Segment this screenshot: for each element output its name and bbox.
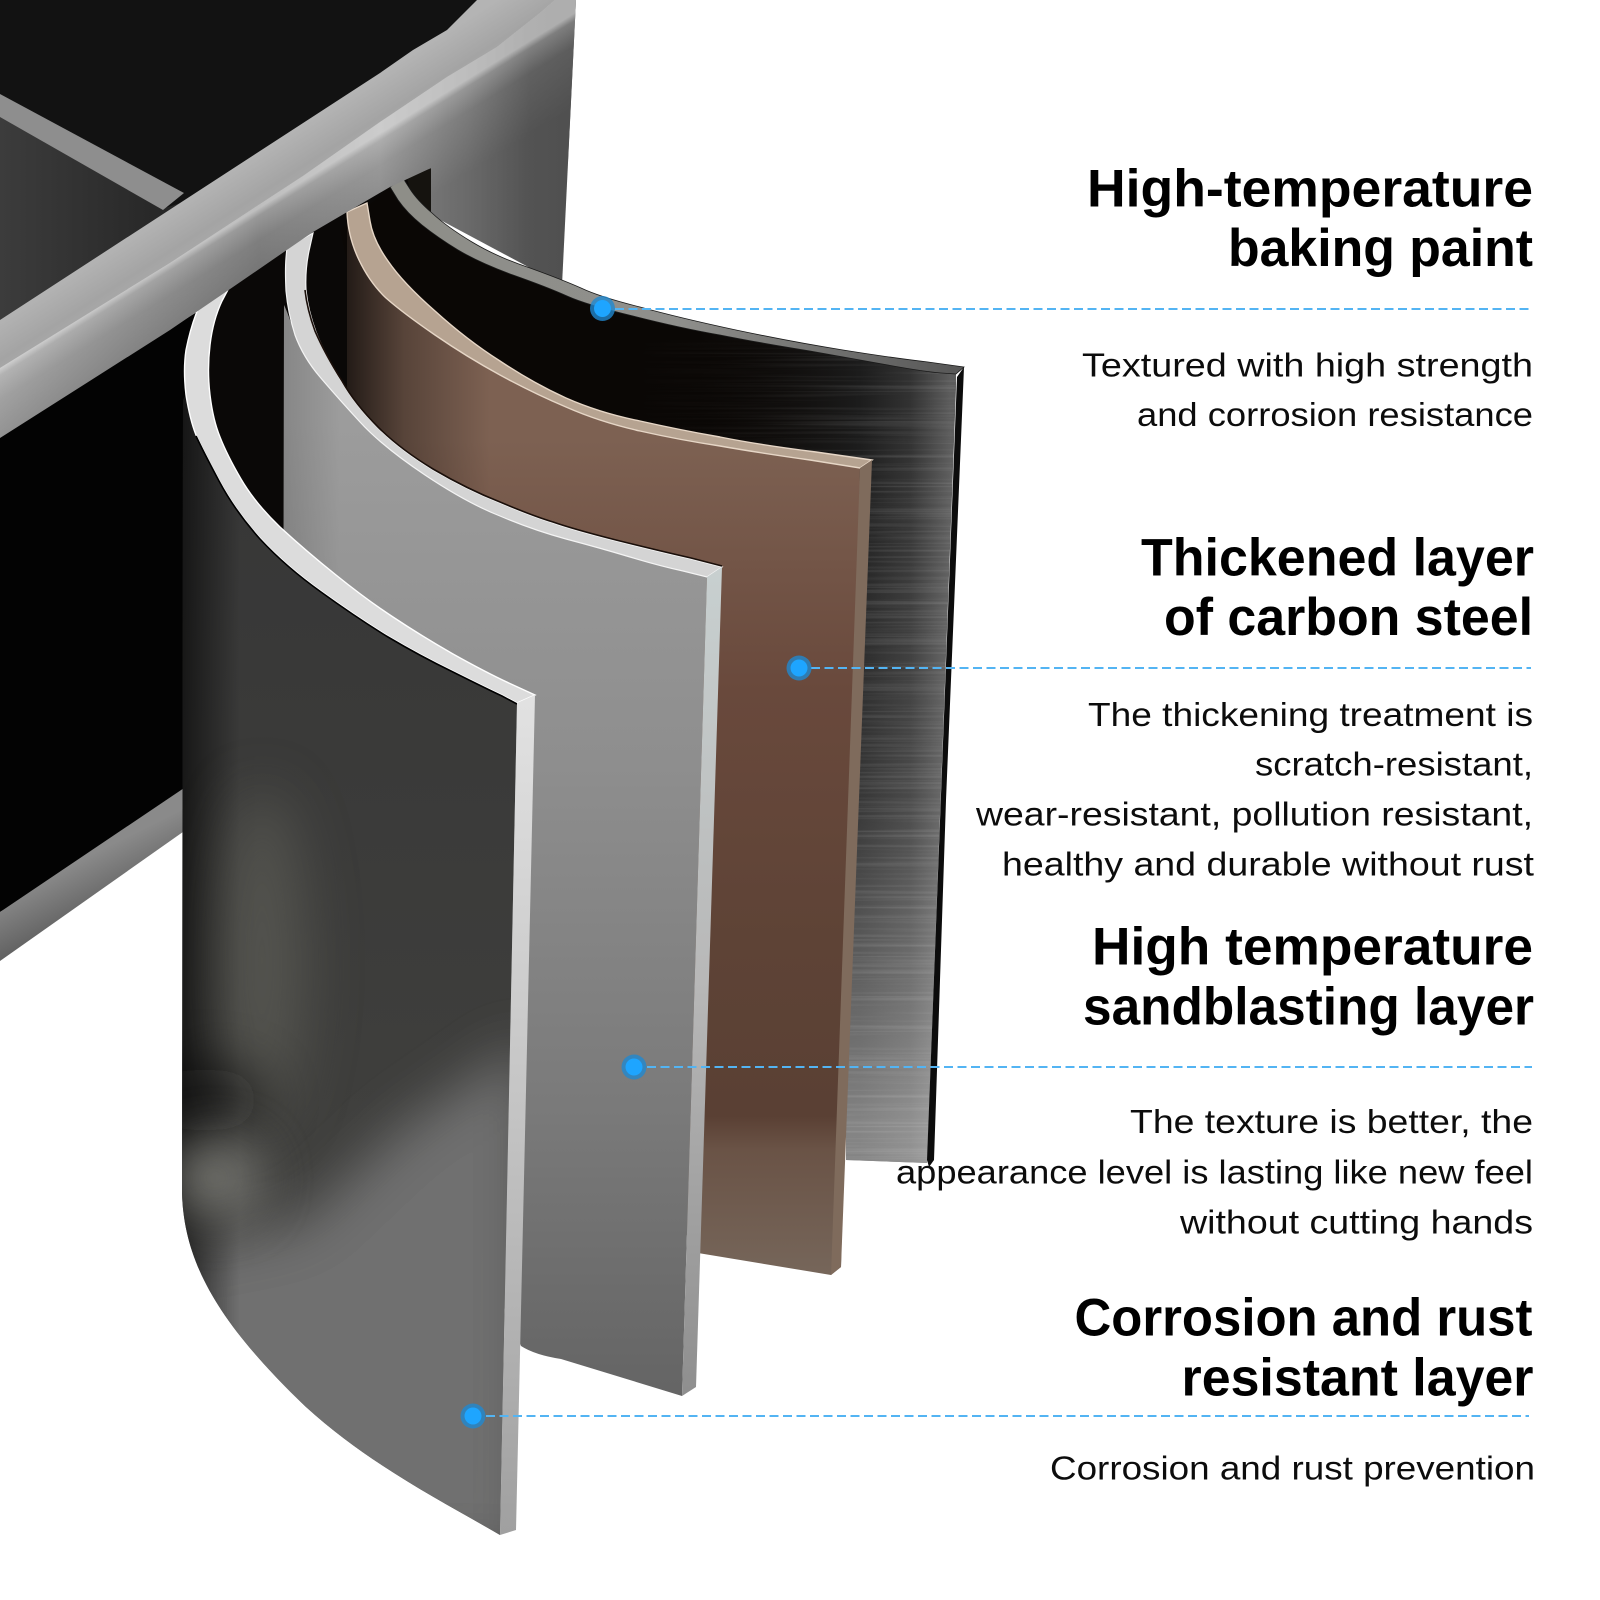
layer 4 shadow line	[196, 436, 517, 704]
layer 4 side edge	[500, 695, 535, 1535]
heading: corrosion and rust resistant layer: resistant layer	[1182, 1348, 1534, 1408]
layer 2 body	[347, 212, 860, 1275]
text: sandblasting description: appearance level is lasting like new feel	[896, 1154, 1533, 1190]
heading: high temperature sandblasting layer	[1083, 918, 1534, 1036]
callout 1	[590, 296, 1532, 321]
layer 3 top edge	[286, 233, 722, 577]
rim lower band	[0, 0, 576, 438]
text: baking paint description	[1082, 346, 1533, 433]
marker dot 2	[786, 656, 812, 680]
leader line 3	[647, 1066, 1532, 1068]
text: carbon steel description: wear-resistant, pollution resistant,	[975, 796, 1533, 832]
callout 4	[460, 1404, 1529, 1428]
sink side: lower grey lip	[0, 784, 190, 961]
sink side: notch	[396, 168, 431, 212]
leader line 2	[811, 667, 1531, 669]
heading: high temperature sandblasting layer: High temperature	[1092, 918, 1533, 976]
layer 4 reflections	[182, 396, 510, 1535]
layer 1 top edge	[390, 178, 964, 374]
text: baking paint description: and corrosion resistance	[1137, 396, 1533, 433]
text: carbon steel description: healthy and durable without rust	[1002, 846, 1534, 882]
rim upper band	[0, 0, 555, 368]
text: carbon steel description: The thickening treatment is	[1088, 696, 1533, 733]
heading: thickened layer of carbon steel: Thickened layer	[1141, 528, 1534, 588]
layer 2 shaded inner curve	[347, 212, 860, 1275]
layer 2 top edge	[347, 203, 872, 468]
text: sandblasting description	[896, 1103, 1533, 1240]
layer 3 shadow line on brown	[305, 290, 722, 566]
text: corrosion description: Corrosion and rust prevention	[1050, 1450, 1535, 1486]
layer: thickened carbon steel (brown)	[347, 203, 872, 1275]
layer 3 side edge	[682, 567, 722, 1396]
layer 2 side edge	[831, 460, 872, 1275]
text: sandblasting description: without cutting hands	[1179, 1204, 1533, 1240]
layer: corrosion and rust resistant (dark front sheet)	[182, 290, 536, 1535]
text: baking paint description: Textured with high strength	[1082, 346, 1533, 384]
layer 3 shaded inner curve	[283, 305, 707, 1396]
sink divider	[0, 94, 184, 210]
heading: thickened layer of carbon steel	[1141, 528, 1534, 647]
marker dot 1	[590, 296, 615, 321]
layer 4 top edge	[184, 282, 535, 703]
rim lower band sheen	[0, 0, 576, 438]
layer: high temperature sandblasting (grey)	[283, 233, 722, 1396]
leader line 1	[615, 308, 1532, 310]
sink interior shadow	[190, 150, 420, 640]
layer 1 body	[340, 187, 956, 1163]
heading: corrosion and rust resistant layer	[1074, 1288, 1534, 1408]
marker dot 4	[460, 1404, 486, 1428]
layer 4 body	[182, 395, 517, 1535]
leader line 4	[486, 1415, 1529, 1417]
heading: high-temperature baking paint: baking paint	[1228, 219, 1533, 278]
sink side: right grey face	[431, 0, 576, 285]
layer 1 side edge	[927, 367, 964, 1167]
layer: high-temperature baking paint (brushed black)	[390, 180, 965, 1166]
sink basin: lower dark bowl	[0, 115, 190, 330]
sink rim	[0, 0, 576, 438]
callout 3	[622, 1054, 1532, 1080]
text: carbon steel description	[975, 696, 1534, 882]
heading: corrosion and rust resistant layer: Corrosion and rust	[1074, 1288, 1532, 1348]
heading: high-temperature baking paint	[1087, 160, 1533, 278]
sink basin: upper black bowl	[0, 0, 490, 340]
text: carbon steel description: scratch-resistant,	[1255, 746, 1533, 782]
sink side: black wall	[0, 310, 200, 912]
heading: high temperature sandblasting layer: sandblasting layer	[1083, 978, 1534, 1036]
layer 1 brushed streaks	[780, 356, 956, 1154]
heading: high-temperature baking paint: High-temperature	[1087, 160, 1533, 218]
layer 1 brushed sheen	[846, 548, 948, 1163]
heading: thickened layer of carbon steel: of carbon steel	[1164, 588, 1533, 647]
layer 3 body	[283, 305, 707, 1396]
text: sandblasting description: The texture is better, the	[1130, 1103, 1533, 1140]
marker dot 3	[622, 1054, 646, 1080]
callout 2	[786, 656, 1531, 680]
sink body behind the layers	[0, 0, 576, 961]
